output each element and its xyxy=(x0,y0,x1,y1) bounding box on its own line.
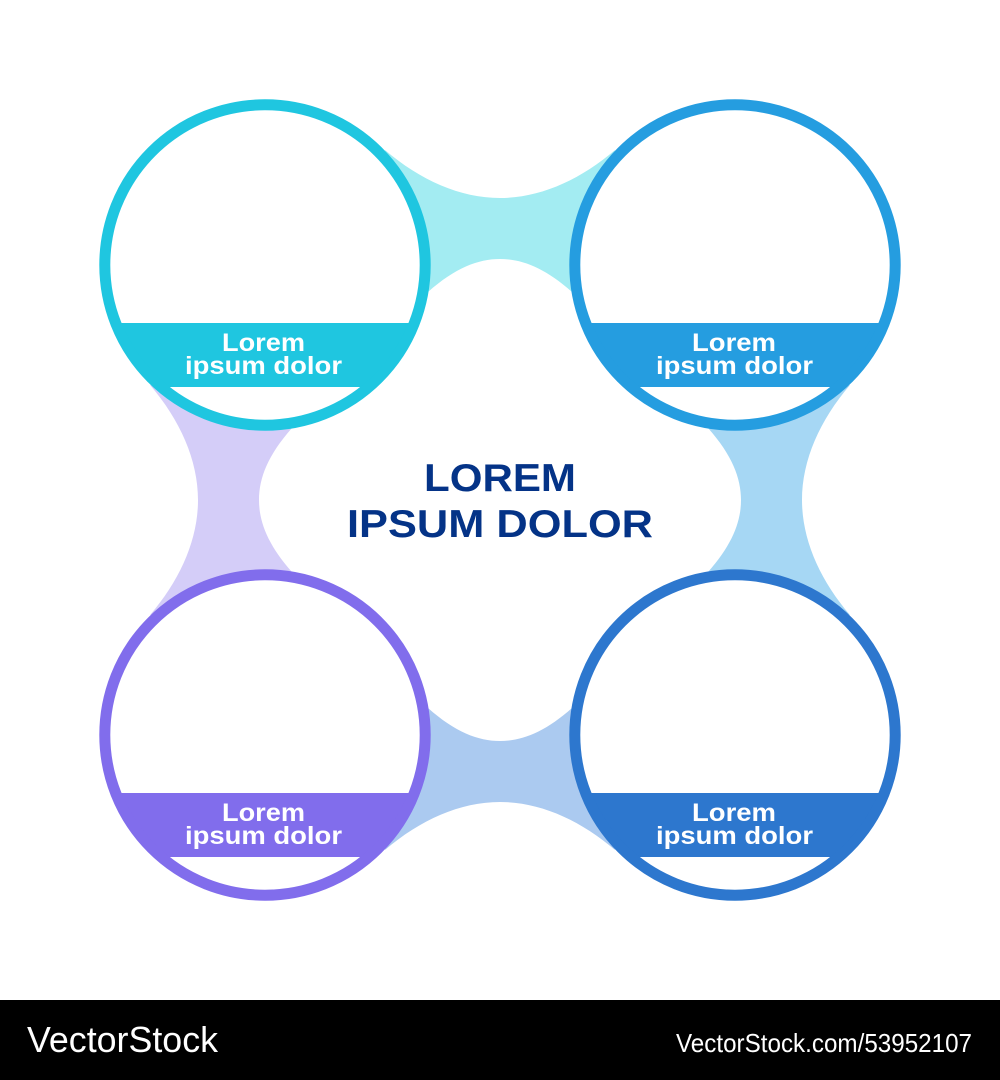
circle: bottom right: Lorem xyxy=(692,799,776,827)
circle: top right: ipsum dolor xyxy=(656,352,813,380)
circle: bottom right: ipsum dolor xyxy=(656,822,813,850)
circle: top left: Lorem xyxy=(222,329,305,357)
connector: left xyxy=(150,385,292,615)
circle: top left: ipsum dolor xyxy=(185,352,342,380)
footer bar: VectorStock.com/53952107 xyxy=(676,1028,972,1058)
title xyxy=(347,457,653,546)
circle: top left xyxy=(105,105,425,425)
title: LOREM xyxy=(424,457,576,500)
connector: top xyxy=(385,150,615,292)
circle: top right xyxy=(575,105,895,425)
circle: bottom left xyxy=(105,575,425,895)
circle: bottom left: ipsum dolor xyxy=(185,822,342,850)
footer bar xyxy=(0,1000,1000,1080)
circle: bottom left: Lorem xyxy=(222,799,305,827)
connector: bottom xyxy=(385,708,615,850)
title: IPSUM DOLOR xyxy=(347,503,653,546)
circle: top right: Lorem xyxy=(692,329,776,357)
footer bar: VectorStock xyxy=(27,1019,219,1060)
circle: bottom right xyxy=(575,575,895,895)
connector: right xyxy=(708,385,850,615)
